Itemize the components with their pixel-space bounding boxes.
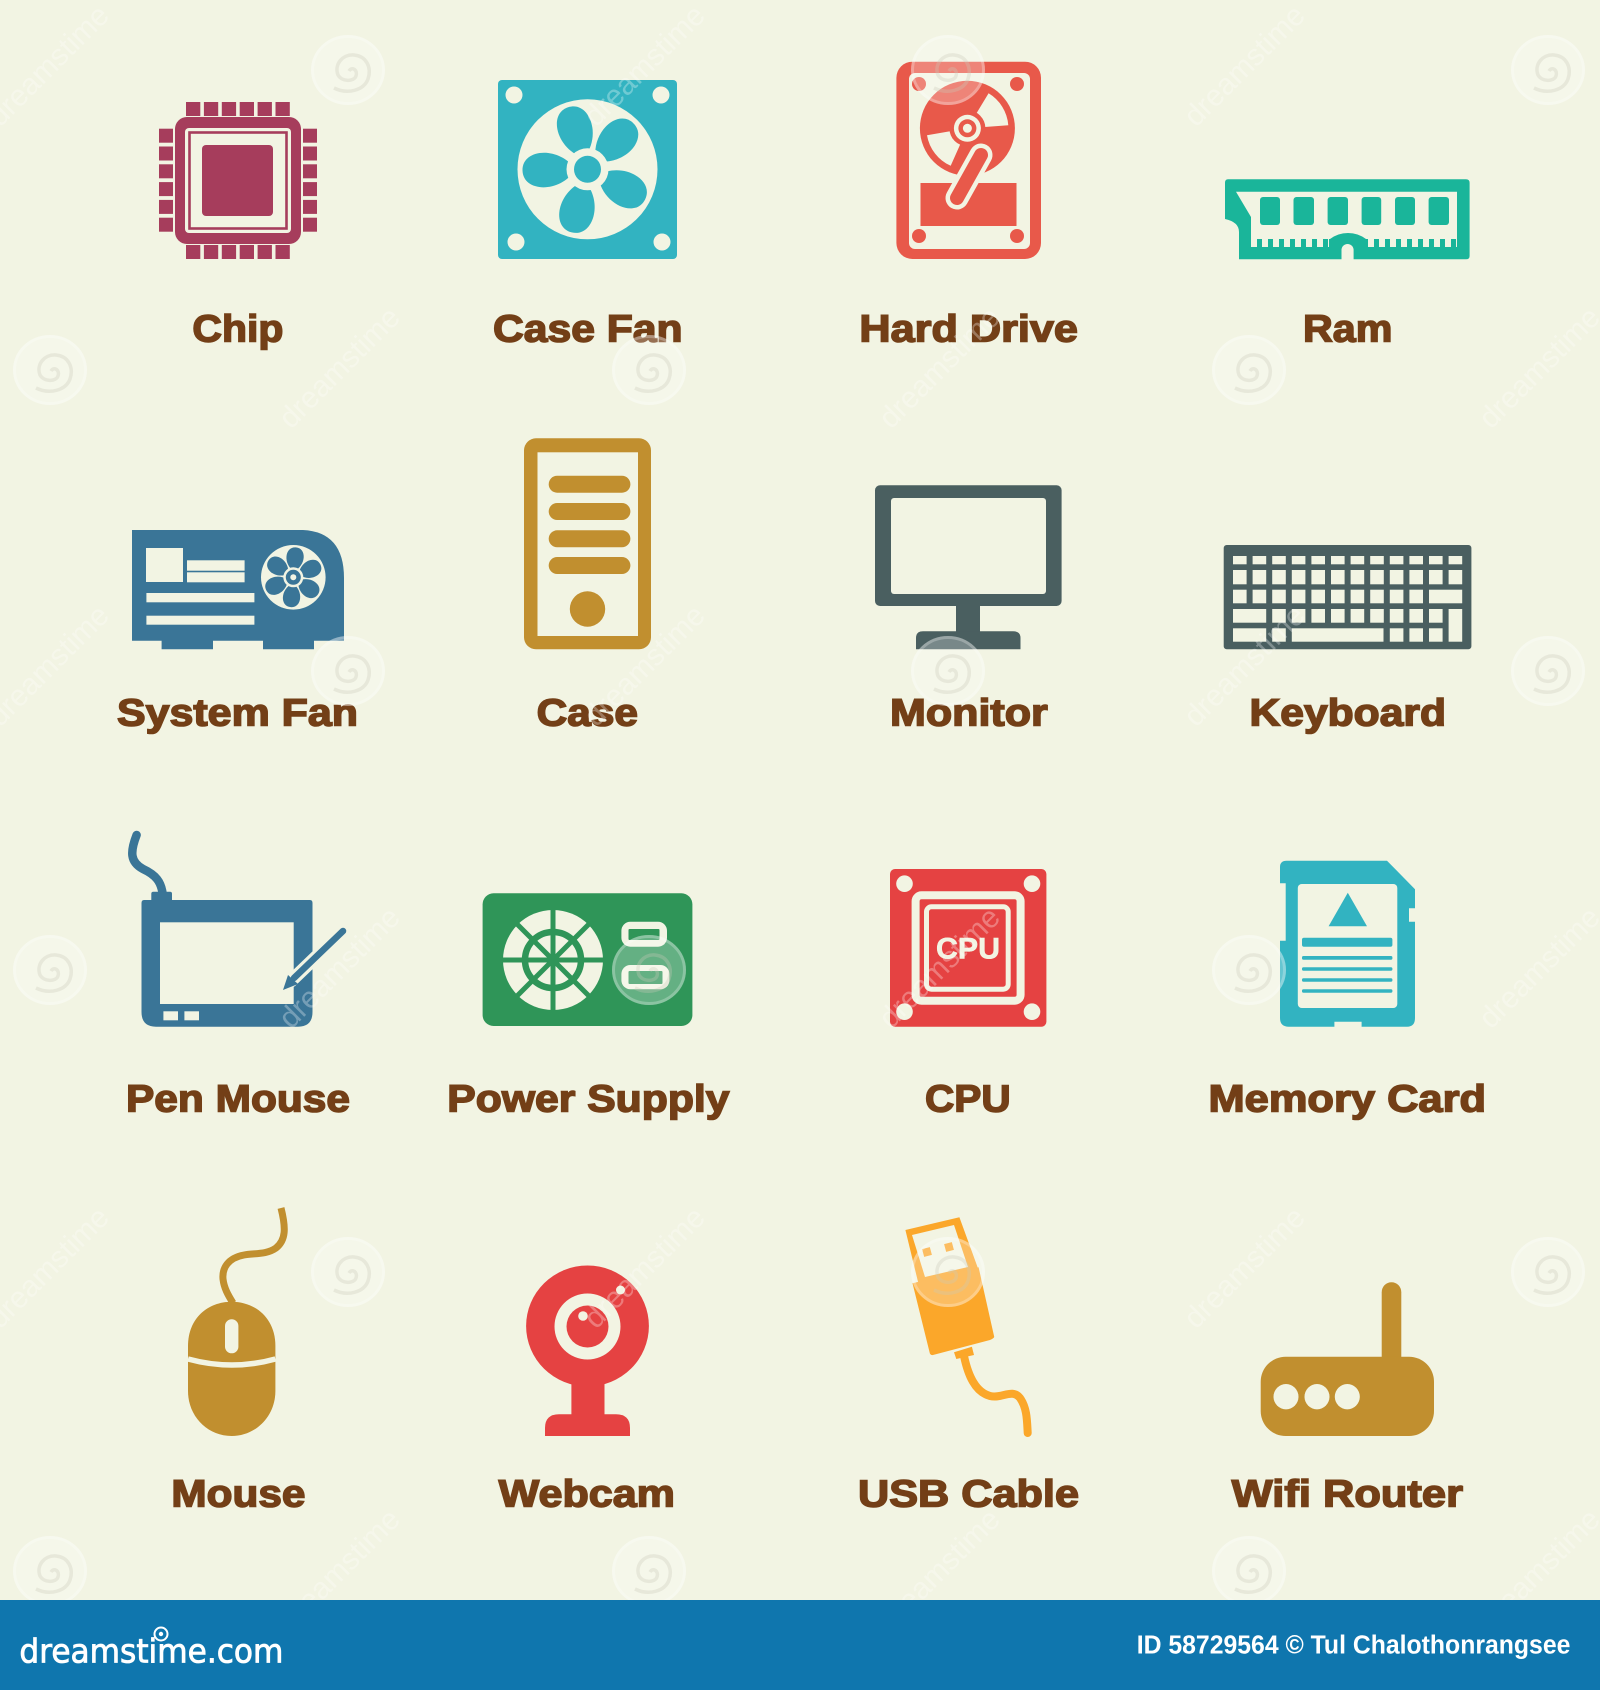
label: Pen Mouse: Pen Mouse	[126, 1079, 350, 1121]
watermark: diagonal text: dreamstime	[873, 1503, 1007, 1637]
watermark: diagonal text: dreamstime	[1178, 599, 1312, 733]
label: Hard Drive: Hard Drive	[859, 309, 1078, 351]
label: System Fan: System Fan	[117, 693, 358, 735]
icon: cpu	[890, 869, 1046, 1027]
icon: usb cable	[905, 1217, 1028, 1433]
label: USB Cable: USB Cable	[858, 1474, 1079, 1516]
icon: mouse	[188, 1208, 284, 1436]
icon: cpu: CPU	[936, 932, 1000, 965]
icon: pen mouse tablet	[132, 835, 343, 1027]
label: Webcam: Webcam	[499, 1474, 675, 1516]
icon: chip	[159, 102, 317, 259]
label: Memory Card: Memory Card	[1208, 1079, 1486, 1121]
label: CPU: CPU	[925, 1079, 1011, 1121]
watermark: diagonal text: dreamstime	[1178, 0, 1312, 133]
watermark: diagonal text: dreamstime	[578, 1201, 712, 1335]
icon: computer case	[524, 438, 651, 649]
icon: power supply	[483, 893, 692, 1026]
footer credit: ID 58729564 © Tul Chalothonrangsee	[1137, 1631, 1570, 1659]
watermark: diagonal text: dreamstime	[578, 599, 712, 733]
watermark: diagonal text: dreamstime	[273, 901, 407, 1035]
watermark: diagonal text: dreamstime	[873, 901, 1007, 1035]
icon: hard drive	[896, 62, 1041, 259]
icon: wifi router	[1261, 1282, 1434, 1436]
label: Keyboard: Keyboard	[1250, 693, 1446, 735]
label: Chip: Chip	[192, 309, 283, 351]
label: Power Supply: Power Supply	[447, 1079, 730, 1121]
icon: monitor	[875, 485, 1062, 649]
label: Ram: Ram	[1303, 309, 1392, 351]
watermark: diagonal text: dreamstime	[273, 301, 407, 435]
label: Wifi Router: Wifi Router	[1232, 1474, 1463, 1516]
label: Case: Case	[537, 693, 638, 735]
watermark: diagonal text: dreamstime	[1178, 1201, 1312, 1335]
icon: case fan	[498, 80, 677, 259]
footer banner	[0, 1600, 1600, 1690]
footer logo: dreamstime.com: dreamstime.com	[19, 1632, 283, 1671]
watermark: diagonal text: dreamstime	[578, 0, 712, 133]
icon: memory card	[1280, 861, 1415, 1027]
icon: system fan	[132, 530, 344, 649]
watermark: diagonal text: dreamstime	[273, 1503, 407, 1637]
label: Case Fan: Case Fan	[493, 309, 683, 351]
label: Mouse: Mouse	[171, 1474, 305, 1516]
label: Monitor: Monitor	[890, 693, 1048, 735]
watermark: diagonal text: dreamstime	[873, 301, 1007, 435]
icon: webcam	[526, 1266, 649, 1436]
icon: keyboard	[1224, 545, 1471, 649]
icon: ram module	[1225, 179, 1470, 259]
